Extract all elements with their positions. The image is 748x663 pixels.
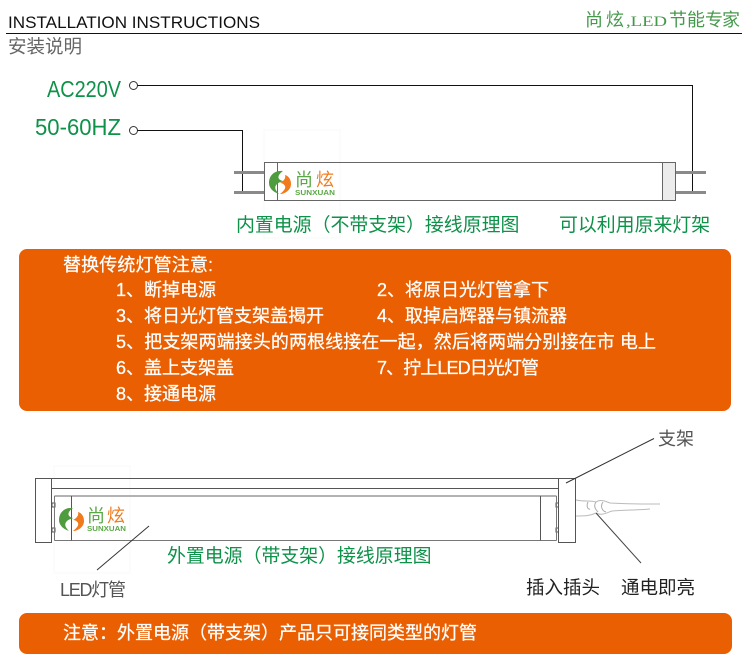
- steps: 6、盖上支架盖: [116, 358, 234, 378]
- voltage label: AC220V: [47, 76, 121, 102]
- slogan: ,LED: [626, 14, 667, 30]
- slogan: 节: [669, 10, 687, 30]
- callout: LED tube: [60, 526, 149, 600]
- steps: 1、断掉电源: [116, 280, 216, 300]
- callout: bracket: [566, 429, 694, 483]
- slogan: [585, 10, 740, 30]
- faint logo frame: [54, 466, 130, 573]
- steps: 4、取掉启辉器与镇流器: [377, 306, 567, 326]
- steps: 5、把支架两端接头的两根线接在一起，然后将两端分别接在市 电上: [116, 332, 656, 352]
- steps: [116, 279, 656, 404]
- title: installation instructions: INSTALLATION INSTRUCTIONS: [8, 13, 260, 32]
- steps: 8、接通电源: [116, 384, 216, 404]
- LED tube: [264, 162, 676, 200]
- slogan: 能: [687, 10, 705, 30]
- callout: plug in and light up: 插入插头: [526, 577, 600, 598]
- steps: 3、将日光灯管支架盖揭开: [116, 306, 324, 326]
- callout: plug in and light up: [526, 513, 695, 598]
- diagram: external power with bracket: [36, 429, 695, 600]
- callout: LED tube: LED灯管: [60, 580, 126, 600]
- caption: wiring diagram: 内置电源（不带支架）接线原理图: [236, 214, 519, 236]
- header: [6, 10, 742, 57]
- live wire: [130, 82, 692, 194]
- logo: 尚: [87, 506, 105, 526]
- bracket: [36, 478, 576, 542]
- tube pins: [234, 171, 706, 194]
- panel: replacement notes: [19, 249, 731, 411]
- neutral wire: [130, 126, 242, 194]
- logo: 尚: [295, 170, 313, 190]
- logo: SUNXUAN: [87, 526, 126, 533]
- subtitle: installation guide: 安装说明: [8, 36, 82, 57]
- logo: SUNXUAN: [295, 190, 335, 197]
- logo: [269, 170, 335, 197]
- logo: [59, 506, 126, 533]
- panel: note on compatible tubes: 注意：外置电源（带支架）产品只可接同类型的灯管: [63, 623, 477, 643]
- LED tube: [54, 496, 556, 540]
- slogan: 炫: [606, 10, 624, 30]
- diagram: built-in power wiring: [35, 76, 710, 238]
- slogan: 家: [722, 10, 740, 30]
- caption: reuse original fixture: 可以利用原来灯架: [559, 214, 710, 236]
- callout: plug in and light up: 通电即亮: [621, 577, 695, 598]
- slogan: 专: [705, 10, 723, 30]
- frequency label: 50-60HZ: [35, 114, 121, 140]
- panel heading: 替换传统灯管注意:: [63, 255, 213, 275]
- callout: bracket: 支架: [658, 429, 694, 449]
- plug and cable: [576, 500, 660, 516]
- logo: 炫: [107, 506, 125, 526]
- caption: wiring diagram: 外置电源（带支架）接线原理图: [167, 545, 431, 567]
- logo: 炫: [316, 170, 334, 190]
- slogan: 尚: [585, 10, 603, 30]
- faint logo frame: [264, 130, 340, 238]
- panel: note on compatible tubes: [19, 613, 732, 654]
- steps: 2、将原日光灯管拿下: [377, 279, 549, 300]
- steps: 7、拧上LED日光灯管: [377, 358, 539, 378]
